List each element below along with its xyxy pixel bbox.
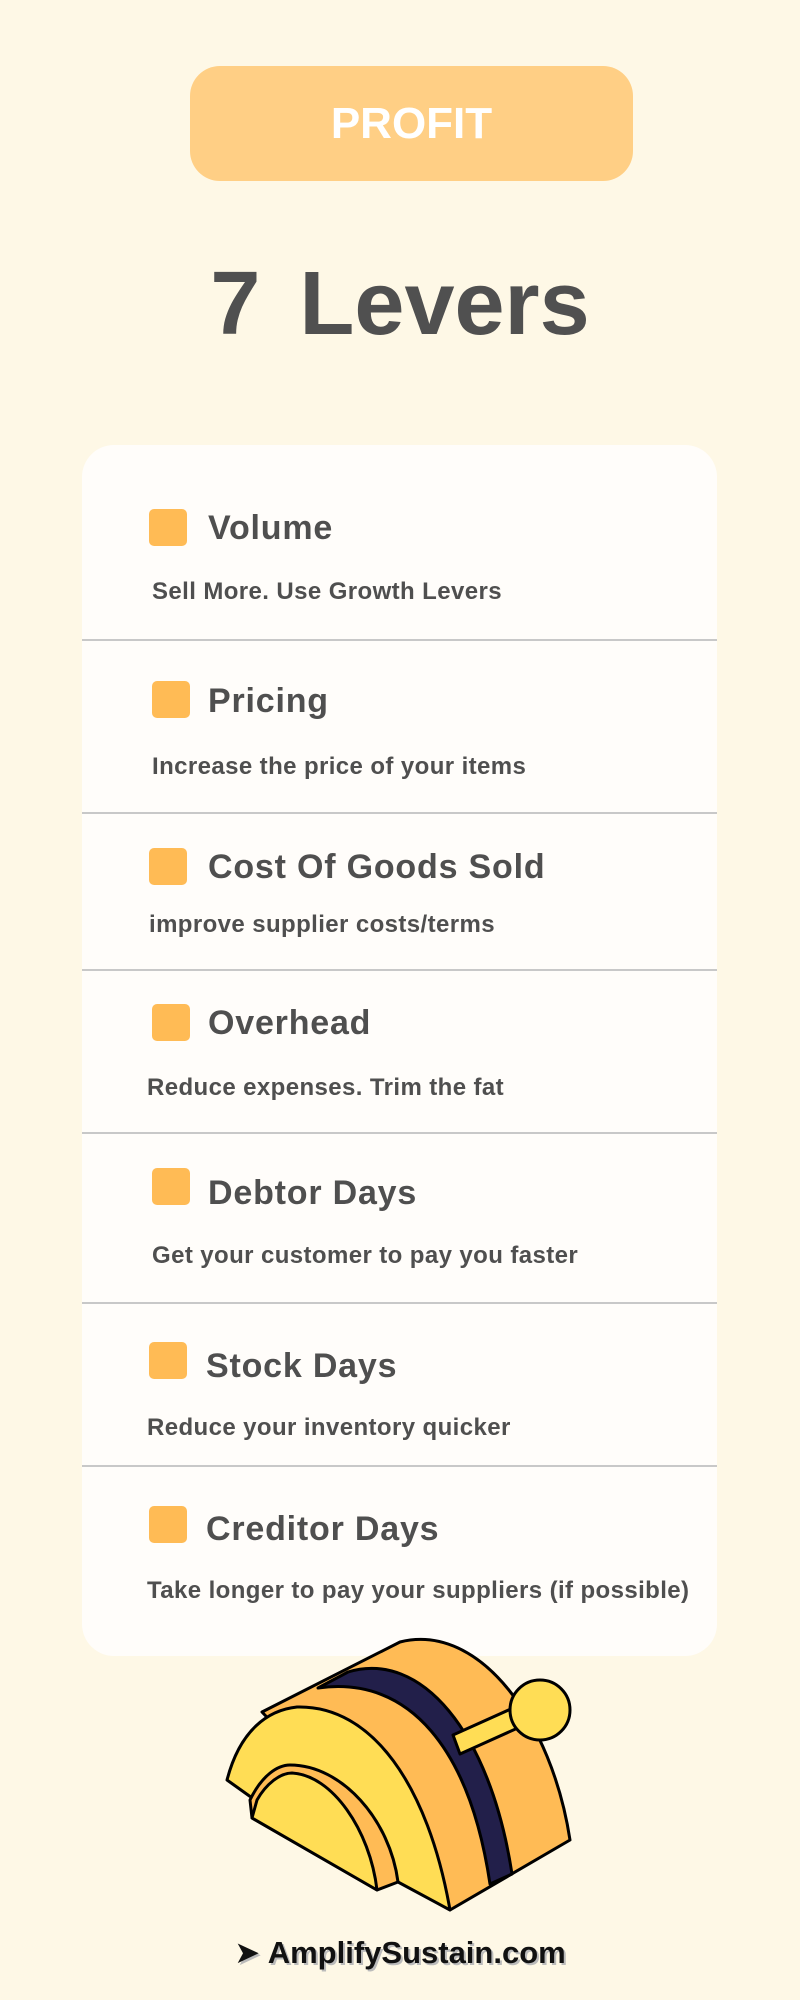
lever: Overhead [147, 1004, 504, 1101]
lever: Debtor Days: Get your customer to pay you faster [152, 1242, 578, 1269]
lever: Volume [149, 509, 502, 605]
lever: Pricing [152, 681, 526, 780]
lever: Debtor Days: Debtor Days [208, 1174, 417, 1212]
heading: 7 Levers: 7 Levers [210, 254, 590, 354]
footer: brand: ➤ AmplifySustain.com [234, 1935, 566, 1970]
lever: Pricing: Pricing [208, 682, 329, 720]
lever: Creditor Days: Take longer to pay your suppliers (if possible) [147, 1577, 689, 1604]
lever: Creditor Days [147, 1506, 689, 1604]
lever: Volume: Volume [208, 509, 333, 547]
lever: Volume: Sell More. Use Growth Levers [152, 578, 502, 605]
lever: Cost Of Goods Sold [149, 848, 545, 938]
lever: Creditor Days: Creditor Days [206, 1510, 439, 1548]
lever: Stock Days: Stock Days [206, 1347, 397, 1385]
title pill: PROFIT: PROFIT [331, 98, 492, 148]
lever: Stock Days [147, 1342, 511, 1441]
lever: Debtor Days [152, 1168, 578, 1269]
title pill: PROFIT [190, 66, 633, 181]
panel: levers list card [82, 445, 717, 1656]
lever: Stock Days: Reduce your inventory quicker [147, 1414, 511, 1441]
lever: Cost Of Goods Sold: improve supplier costs/terms [149, 911, 495, 938]
lever: Cost Of Goods Sold: Cost Of Goods Sold [208, 848, 545, 886]
lever: Pricing: Increase the price of your items [152, 753, 526, 780]
lever: Overhead: Reduce expenses. Trim the fat [147, 1074, 504, 1101]
lever: Overhead: Overhead [208, 1004, 371, 1042]
